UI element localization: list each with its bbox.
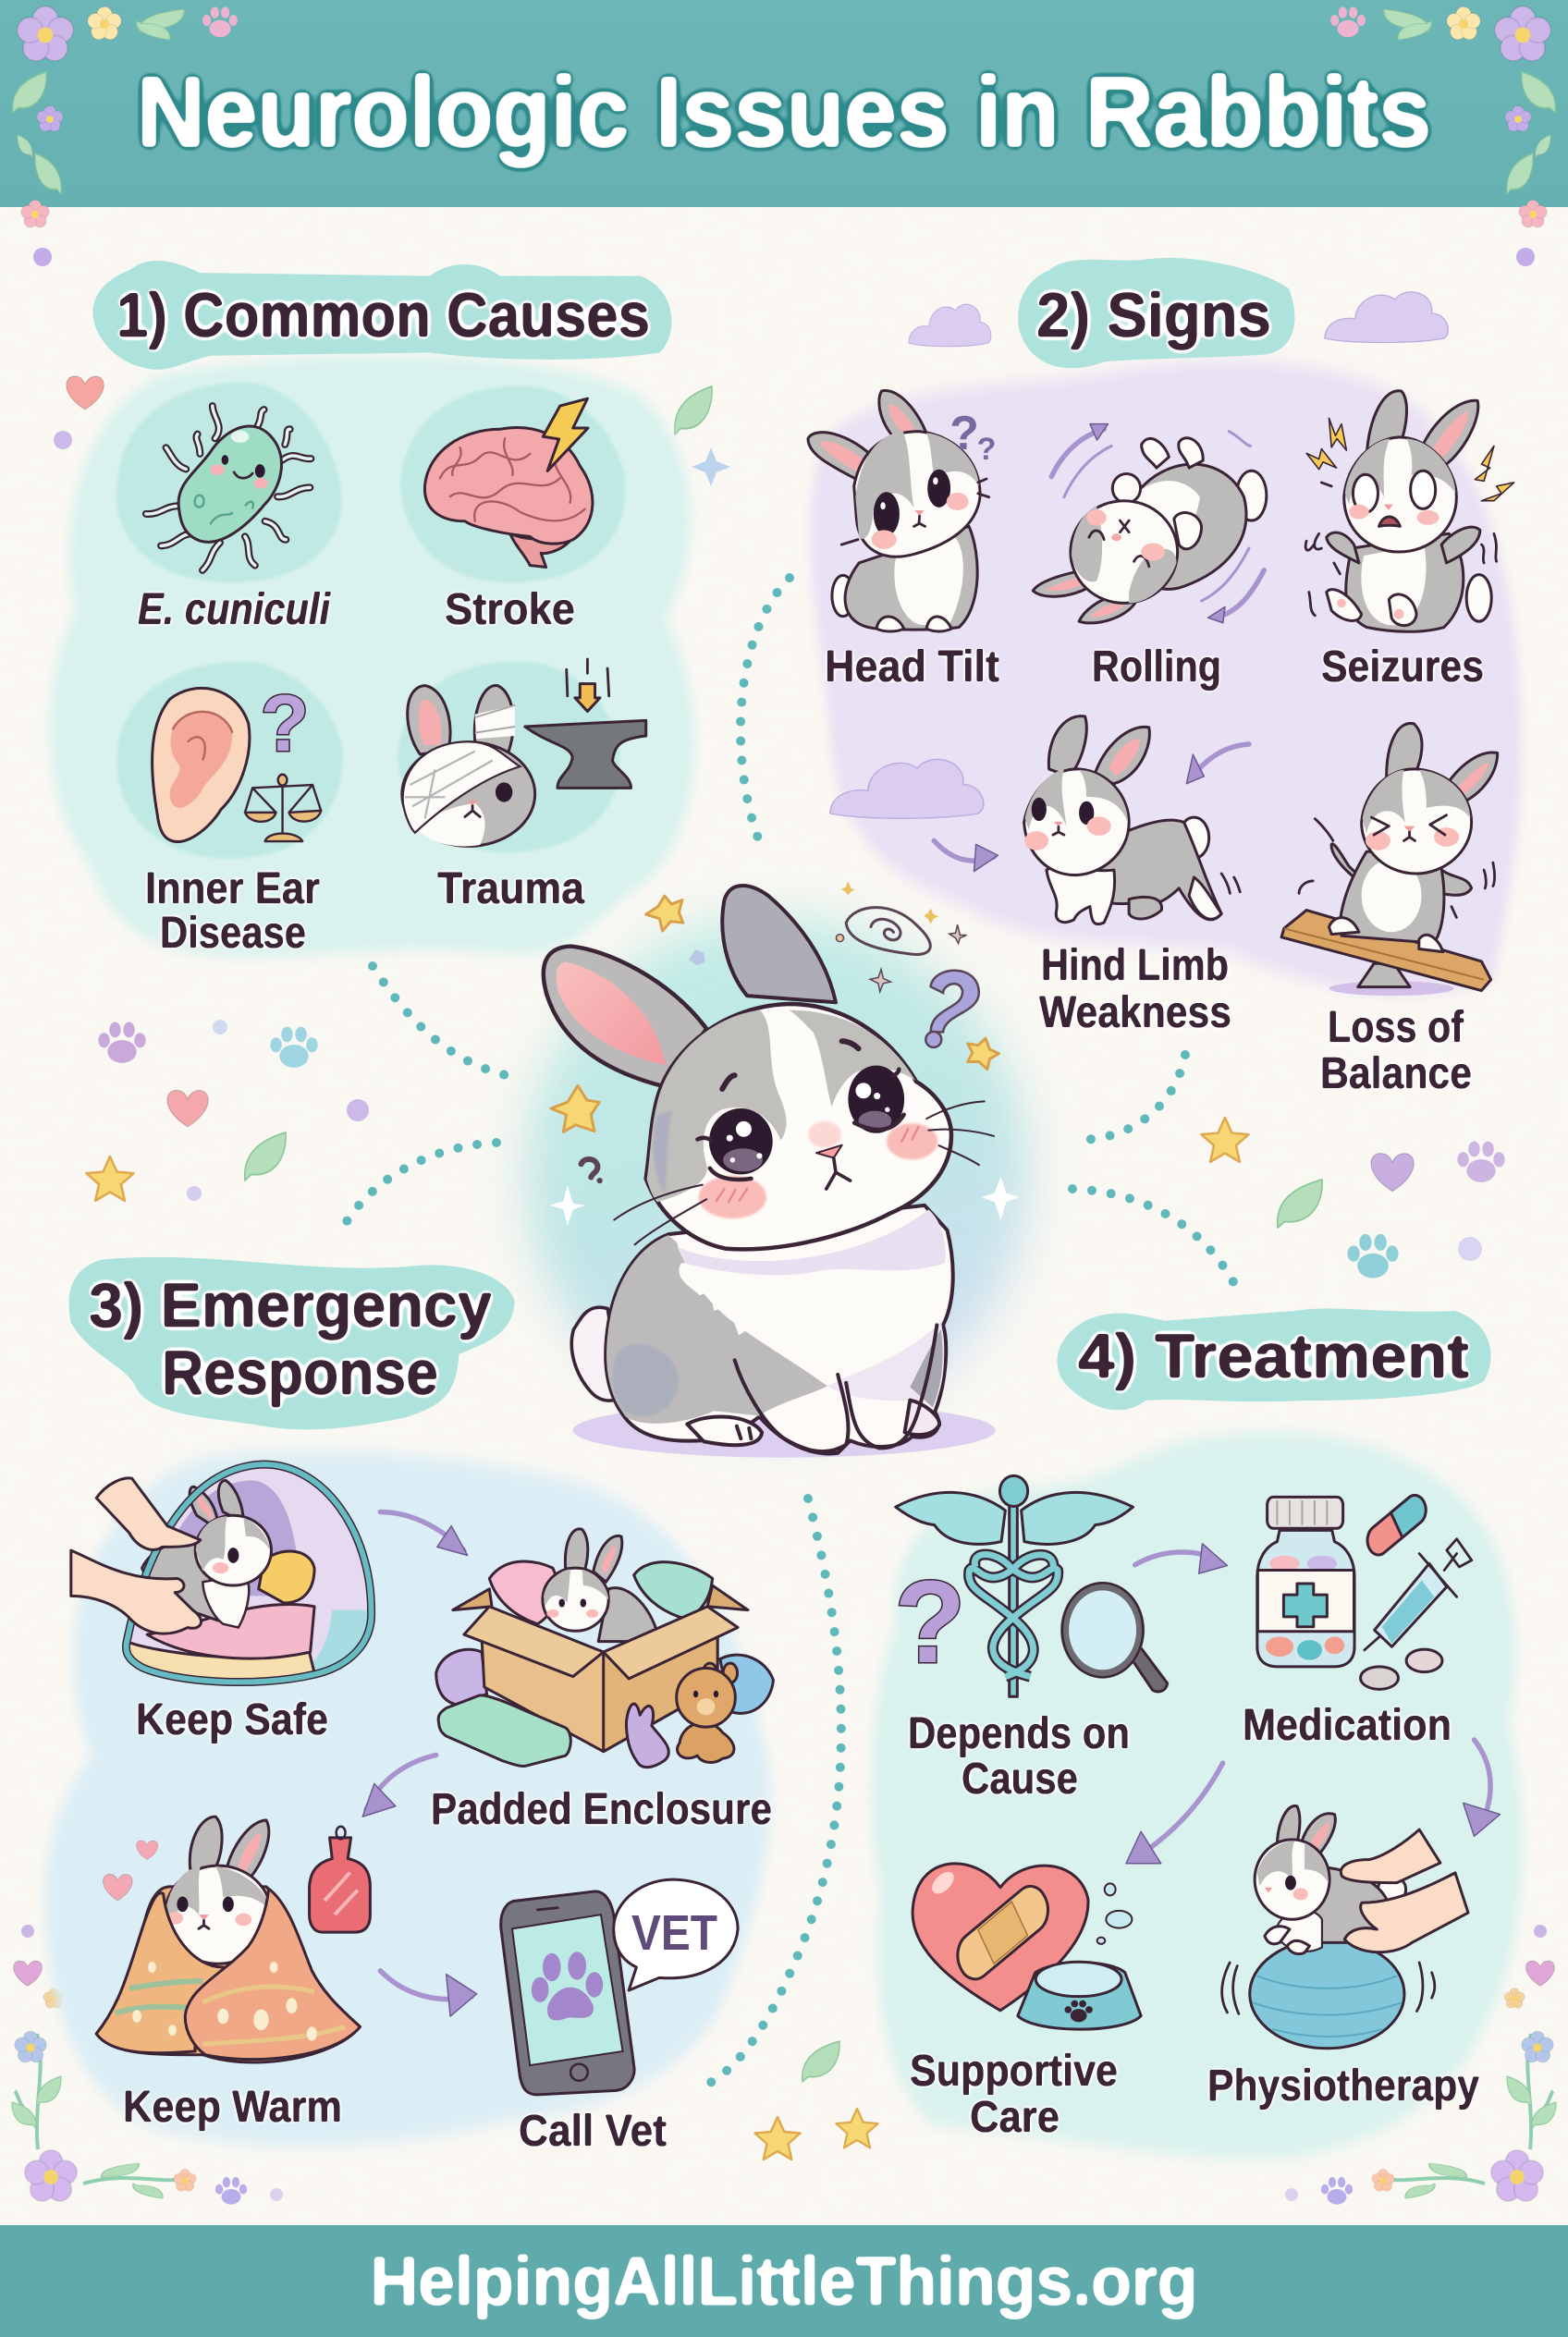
label: Rolling: Rolling	[1092, 642, 1221, 691]
label: Depends on Cause: Cause	[962, 1755, 1078, 1804]
central glow	[525, 917, 1028, 1431]
label: E. cuniculi: E. cuniculi	[138, 585, 331, 634]
label: Seizures: Seizures	[1321, 642, 1484, 691]
label: Loss of Balance: Balance	[1320, 1049, 1472, 1098]
label: Inner Ear Disease: Disease	[160, 909, 306, 958]
label: Loss of Balance	[1320, 1003, 1472, 1098]
icon: rolling rabbit	[1033, 424, 1267, 623]
label: Inner Ear Disease: Inner Ear	[145, 864, 320, 913]
heading badge: signs	[1018, 258, 1294, 368]
body	[606, 1205, 953, 1453]
label: Call Vet: Call Vet	[519, 2107, 667, 2156]
icon: question mark: ?	[261, 679, 309, 768]
icon: question marks	[949, 407, 996, 467]
label: Depends on Cause	[908, 1709, 1130, 1804]
dotted connectors	[339, 578, 1241, 2083]
panel: 4 treatment	[871, 1308, 1523, 2160]
stars and sparkles	[550, 881, 1020, 1226]
icon: medicine bottle and syringe	[1126, 1490, 1501, 1864]
icon: heart with bandage and bowl	[913, 1864, 1141, 2029]
footer banner	[0, 2225, 1568, 2337]
panel: 1 common causes	[50, 261, 694, 958]
icon: purple cloud	[830, 759, 984, 818]
icon: rabbit in blanket	[96, 1817, 477, 2062]
icon: rabbit on therapy ball	[1222, 1806, 1468, 2049]
heading badge: emergency response: Response	[162, 1338, 438, 1408]
cheeks	[699, 1176, 766, 1218]
heading badge: signs: 2) Signs	[1036, 280, 1271, 350]
heading badge: common causes	[92, 261, 672, 370]
title: Neurologic Issues in Rabbits	[137, 55, 1431, 167]
icon: question mark: ?	[895, 1557, 965, 1687]
heading badge: emergency response	[68, 1257, 515, 1429]
label: Stroke: Stroke	[445, 585, 575, 634]
heading badge: common causes: 1) Common Causes	[116, 280, 650, 350]
label: Keep Warm: Keep Warm	[123, 2083, 342, 2132]
icon: bandaged rabbit and anvil	[402, 659, 646, 846]
icon: seizing rabbit	[1305, 391, 1514, 631]
label: Loss of Balance: Loss of	[1328, 1003, 1464, 1052]
heading badge: treatment: 4) Treatment	[1078, 1321, 1469, 1391]
label: Head Tilt: Head Tilt	[825, 642, 999, 691]
nose and mouth	[808, 1121, 841, 1147]
eyes	[709, 1108, 773, 1174]
icon: carrier with rabbit	[71, 1464, 468, 1682]
central rabbit illustration	[544, 881, 1020, 1458]
icon: rabbit with hind limb weakness	[934, 716, 1249, 924]
label: Medication: Medication	[1243, 1701, 1452, 1750]
icon: brain with lightning	[424, 398, 593, 568]
label: Supportive Care: Care	[970, 2093, 1060, 2142]
heading badge: treatment	[1057, 1308, 1491, 1410]
head	[614, 1004, 994, 1249]
back ear	[722, 886, 836, 1002]
label: Trauma: Trauma	[437, 864, 584, 913]
icon: ear with scales	[153, 688, 321, 841]
icon: rabbit on balance board	[1281, 724, 1498, 996]
label: Depends on Cause: Depends on	[908, 1709, 1130, 1758]
label: Keep Safe: Keep Safe	[136, 1695, 328, 1744]
whiskers	[614, 1101, 994, 1244]
heading badge: emergency response: 3) Emergency	[89, 1270, 492, 1340]
icon: caduceus with magnifier	[896, 1475, 1227, 1696]
label: Supportive Care: Supportive	[910, 2047, 1118, 2096]
icon: rabbit head tilt	[808, 390, 989, 631]
brows	[722, 1041, 859, 1089]
label: Padded Enclosure: Padded Enclosure	[431, 1785, 772, 1834]
ground shadow	[573, 1403, 996, 1458]
label: Hind Limb Weakness	[1039, 941, 1231, 1037]
scattered decorations	[54, 292, 1505, 2160]
website: HelpingAllLittleThings.org	[370, 2243, 1198, 2319]
tail	[571, 1307, 622, 1401]
icon: question marks: ?	[949, 407, 979, 460]
icon: bacterium	[146, 406, 311, 570]
label: Inner Ear Disease	[145, 864, 320, 958]
panel: 3 emergency response	[44, 1257, 773, 2156]
icon: phone with vet bubble	[501, 1879, 738, 2095]
label: Hind Limb Weakness: Weakness	[1039, 988, 1231, 1037]
panel: 2 signs	[808, 258, 1522, 1098]
front ear	[544, 947, 706, 1086]
icon: padded box with rabbit	[362, 1529, 773, 1817]
text: VET: VET	[631, 1905, 717, 1961]
header banner	[0, 0, 1568, 207]
label: Physiotherapy: Physiotherapy	[1207, 2062, 1479, 2111]
label: Supportive Care	[910, 2047, 1118, 2142]
icon: question marks: ?	[977, 432, 996, 467]
label: Hind Limb Weakness: Hind Limb	[1041, 941, 1229, 990]
